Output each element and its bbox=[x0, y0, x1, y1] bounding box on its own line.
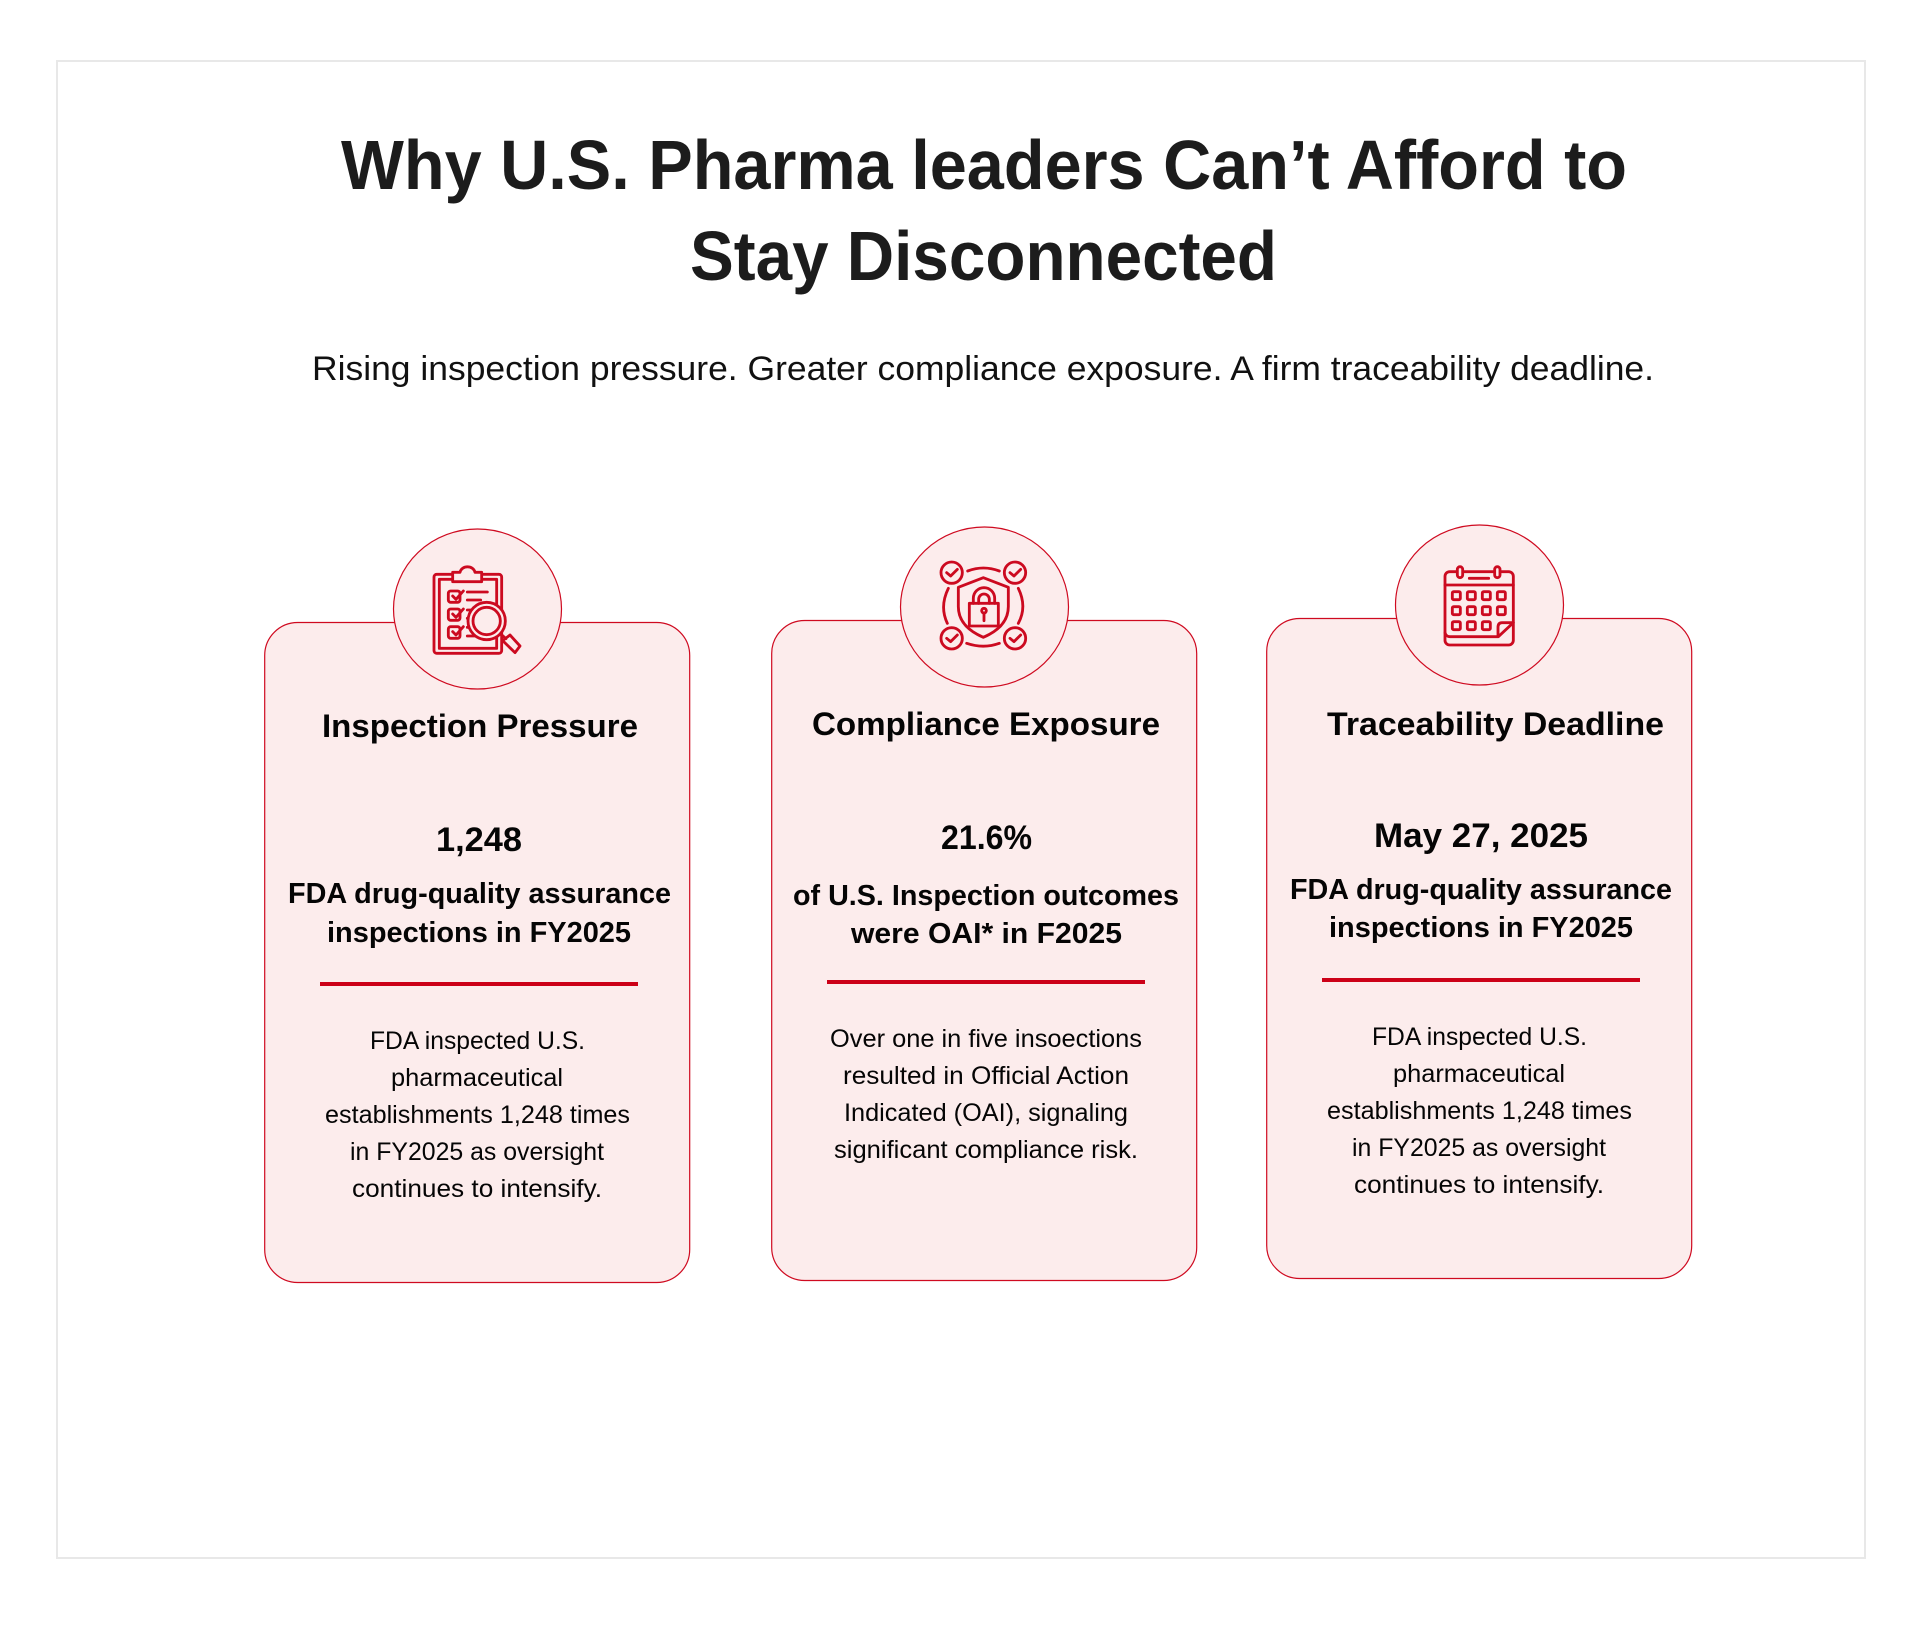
body text: establishments 1,248 times bbox=[1327, 1097, 1632, 1125]
body text: FDA inspected U.S. bbox=[370, 1027, 585, 1055]
title bbox=[341, 126, 1627, 295]
body text: resulted in Official Action bbox=[843, 1062, 1129, 1090]
key date: May 27, 2025 bbox=[1374, 817, 1588, 855]
icon circle bbox=[394, 529, 562, 689]
key statement bbox=[1290, 874, 1672, 944]
body text: Indicated (OAI), signaling bbox=[844, 1099, 1128, 1127]
heading: Inspection Pressure bbox=[322, 708, 638, 744]
body text bbox=[1327, 1023, 1632, 1199]
key statement bbox=[288, 878, 671, 949]
title: Stay Disconnected bbox=[690, 217, 1277, 295]
body text: pharmaceutical bbox=[1393, 1060, 1565, 1088]
heading: Traceability Deadline bbox=[1327, 706, 1664, 742]
title: Why U.S. Pharma leaders Can’t Afford to bbox=[341, 126, 1627, 204]
icon: shield with lock and checks bbox=[941, 562, 1026, 649]
key statement: of U.S. Inspection outcomes bbox=[793, 880, 1179, 912]
body text: in FY2025 as oversight bbox=[1352, 1134, 1606, 1162]
icon: clipboard with magnifier bbox=[434, 567, 520, 653]
key statement: inspections in FY2025 bbox=[1329, 912, 1633, 944]
body text: Over one in five insoections bbox=[830, 1025, 1142, 1053]
body text: significant compliance risk. bbox=[834, 1136, 1138, 1164]
key number: 21.6% bbox=[941, 819, 1032, 857]
heading: Compliance Exposure bbox=[812, 706, 1160, 742]
icon circle bbox=[900, 527, 1068, 687]
key statement: FDA drug-quality assurance bbox=[1290, 874, 1672, 906]
card background bbox=[772, 620, 1197, 1280]
card background bbox=[265, 622, 690, 1282]
body text: in FY2025 as oversight bbox=[350, 1138, 604, 1166]
body text: pharmaceutical bbox=[391, 1064, 563, 1092]
body text: continues to intensify. bbox=[1354, 1171, 1604, 1199]
key statement: inspections in FY2025 bbox=[327, 917, 631, 949]
key statement: FDA drug-quality assurance bbox=[288, 878, 671, 910]
key number: 1,248 bbox=[436, 821, 522, 859]
key statement bbox=[793, 880, 1179, 950]
body text: continues to intensify. bbox=[352, 1175, 602, 1203]
panel: inspection pressure bbox=[265, 529, 690, 1282]
body text bbox=[830, 1025, 1142, 1164]
body text bbox=[325, 1027, 630, 1203]
card background bbox=[1267, 618, 1692, 1278]
panel: traceability deadline bbox=[1267, 525, 1692, 1278]
body text: establishments 1,248 times bbox=[325, 1101, 630, 1129]
icon: calendar bbox=[1445, 567, 1513, 645]
panel: compliance exposure bbox=[772, 527, 1197, 1280]
body text: FDA inspected U.S. bbox=[1372, 1023, 1587, 1051]
key statement: were OAI* in F2025 bbox=[850, 918, 1122, 950]
icon circle bbox=[1396, 525, 1564, 685]
subtitle: Rising inspection pressure. Greater compliance exposure. A firm traceability deadline. bbox=[312, 350, 1654, 388]
